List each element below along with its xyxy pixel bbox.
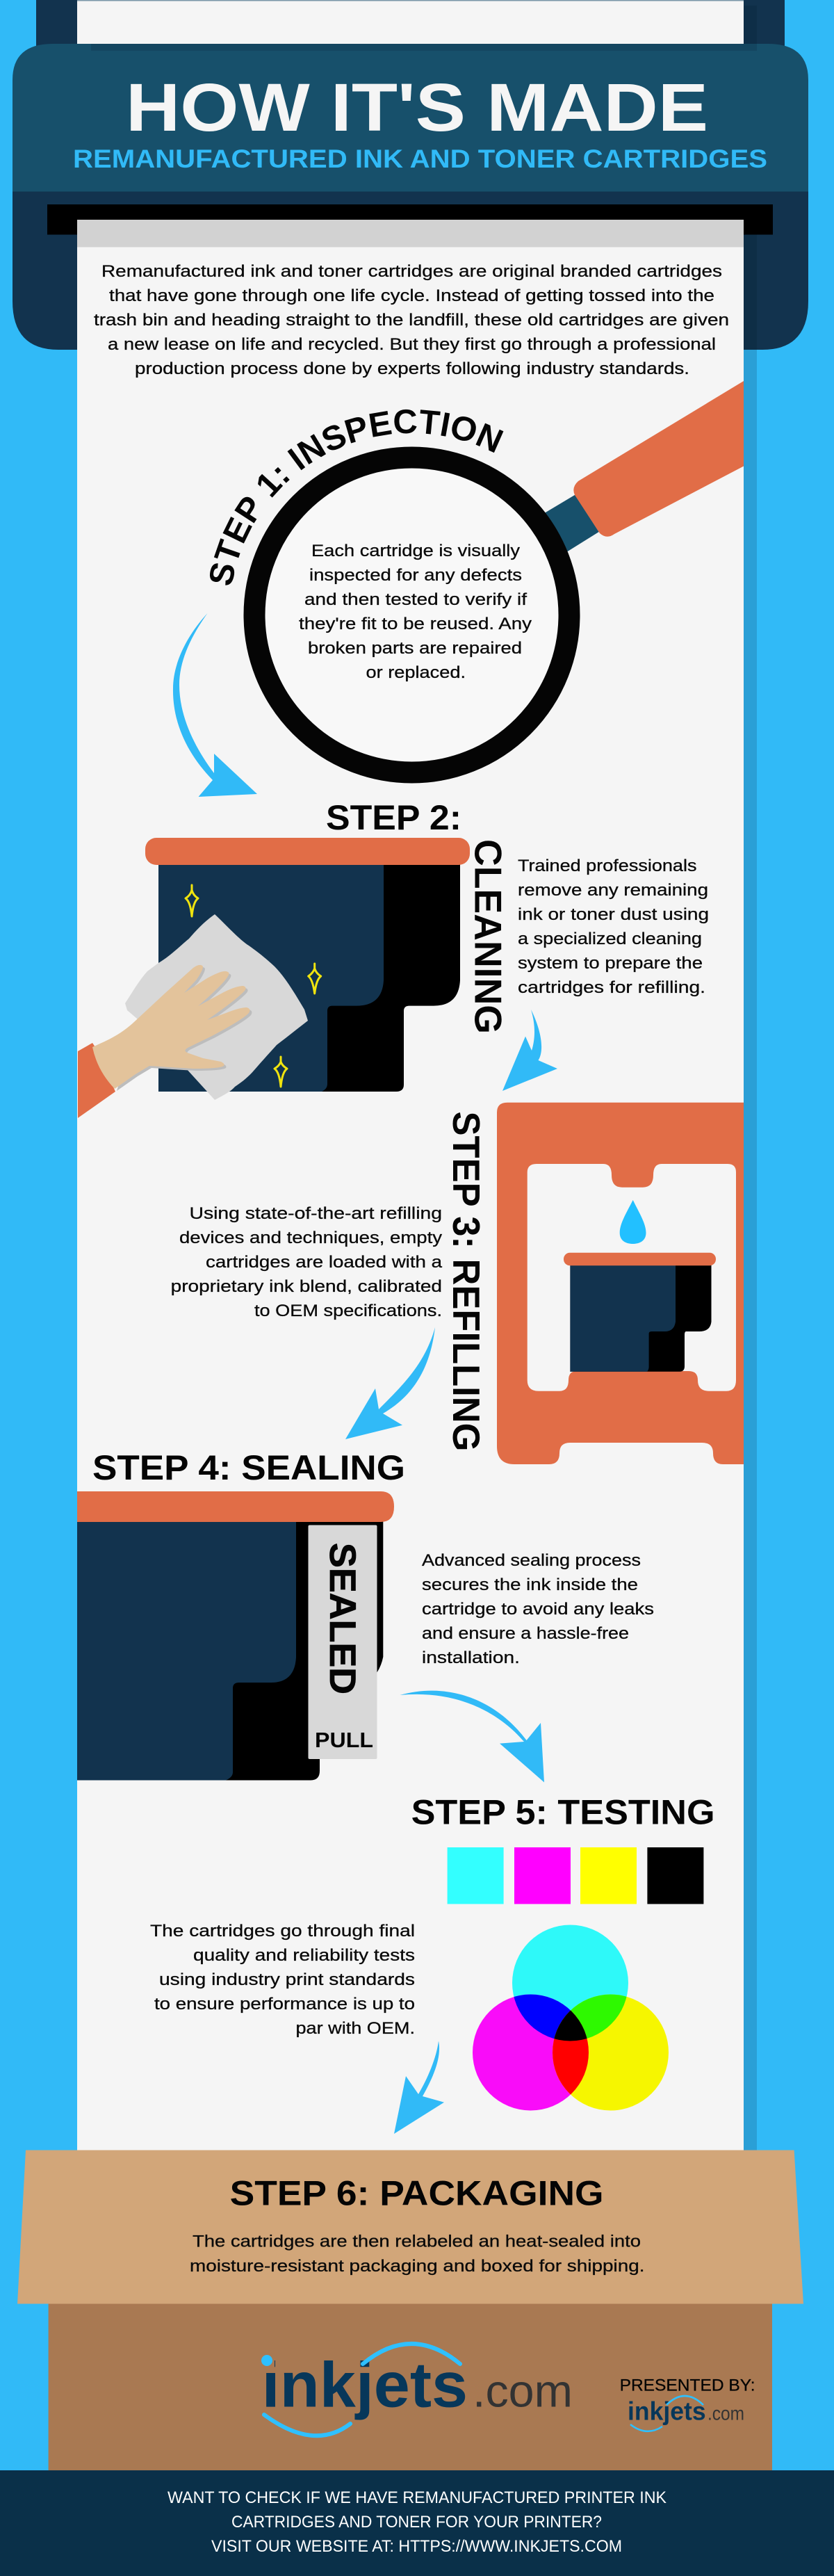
step 3 text: [171, 1204, 443, 1320]
intro text: Remanufactured ink and toner cartridges are original branded cartridges: [101, 262, 722, 281]
panel: box body: [49, 2303, 772, 2470]
step 5 heading: STEP 5: TESTING: [411, 1793, 715, 1832]
panel: box flap: [17, 2150, 803, 2304]
step 5 text: The cartridges go through final: [150, 1922, 415, 1941]
step 5 text: [150, 1922, 415, 2038]
step 4 text: installation.: [422, 1649, 520, 1667]
step 6 text: moisture-resistant packaging and boxed for shipping.: [190, 2257, 645, 2276]
paper sheet: [77, 220, 744, 2160]
panel: footer: [0, 2470, 834, 2576]
arrow: step 5 to step 6: [394, 2041, 444, 2134]
intro text: trash bin and heading straight to the landfill, these old cartridges are given: [94, 311, 729, 330]
arrow: step 4 to step 5: [400, 1691, 544, 1783]
logo: inkjets.com large: inkjets: [262, 2350, 468, 2421]
CMY overlapping circles: [473, 1925, 669, 2111]
step 1 text: [299, 542, 532, 682]
icon: sealed cartridge: [77, 1491, 394, 1780]
title: [73, 70, 767, 173]
label text: SEALED: [322, 1543, 363, 1694]
step 3 text: devices and techniques, empty: [179, 1229, 442, 1247]
label text: PULL: [315, 1728, 373, 1752]
footer text: WANT TO CHECK IF WE HAVE REMANUFACTURED PRINTER INK: [167, 2488, 667, 2507]
CMYK swatches: [448, 1847, 703, 1904]
intro text: production process done by experts following industry standards.: [135, 359, 689, 378]
step 2 text: remove any remaining: [518, 881, 708, 900]
step 3 text: Using state-of-the-art refilling: [189, 1204, 442, 1223]
arrow: step 2 to step 3: [502, 1010, 557, 1091]
sleeve: [78, 1043, 115, 1118]
ink drop: [620, 1200, 646, 1244]
step 3 text: proprietary ink blend, calibrated: [171, 1277, 442, 1296]
printer illustration: [13, 0, 808, 2157]
step 4 heading: STEP 4: SEALING: [92, 1448, 405, 1487]
small cartridge: [570, 1262, 712, 1372]
step 5 text: par with OEM.: [296, 2019, 415, 2038]
step 4 text: Advanced sealing process: [422, 1551, 641, 1570]
step 4 text: and ensure a hassle-free: [422, 1624, 629, 1643]
sparkles: [186, 885, 321, 1087]
step 2 heading: [326, 798, 510, 1034]
step 1 heading: STEP 1: INSPECTION: [210, 409, 503, 585]
intro text: [94, 262, 729, 378]
arrow: step 1 to step 2: [173, 613, 257, 797]
step 1 text: and then tested to verify if: [304, 590, 527, 609]
step 1 text: broken parts are repaired: [308, 639, 522, 658]
step 2 text: ink or toner dust using: [518, 905, 709, 924]
step 5 text: using industry print standards: [159, 1970, 415, 1989]
logo: inkjets.com small: .com: [708, 2403, 744, 2424]
step 2 heading: STEP 2:: [326, 798, 461, 837]
seal label: [309, 1525, 377, 1759]
step 2 text: [518, 857, 709, 997]
footer text: VISIT OUR WEBSITE AT: HTTPS://WWW.INKJETS.COM: [211, 2537, 622, 2556]
step 5 text: to ensure performance is up to: [154, 1995, 415, 2014]
step 5 text: quality and reliability tests: [193, 1946, 415, 1965]
step 2 heading: CLEANING: [467, 839, 510, 1034]
step 2 text: Trained professionals: [518, 857, 696, 875]
step 4 text: [422, 1551, 654, 1667]
logo: inkjets.com large: [261, 2344, 573, 2436]
step 2 text: cartridges for refilling.: [518, 978, 705, 997]
step 1 text: inspected for any defects: [309, 566, 522, 585]
icon: refilling machine: [497, 1103, 744, 1464]
step 3 text: cartridges are loaded with a: [206, 1253, 443, 1272]
step 1 text: they're fit to be reused. Any: [299, 615, 532, 633]
step 1 text: Each cartridge is visually: [311, 542, 520, 560]
step 1 text: or replaced.: [366, 663, 466, 682]
footer text: CARTRIDGES AND TONER FOR YOUR PRINTER?: [231, 2513, 602, 2532]
step 4 text: cartridge to avoid any leaks: [422, 1600, 654, 1619]
hand: [92, 965, 250, 1089]
step 3 text: to OEM specifications.: [254, 1302, 442, 1320]
step 6 text: [190, 2233, 645, 2276]
cloth: [125, 914, 308, 1100]
logo: inkjets.com small: [628, 2396, 744, 2431]
hand shadow: [117, 967, 252, 1091]
step 2 text: a specialized cleaning: [518, 930, 702, 948]
title: HOW IT'S MADE: [126, 70, 708, 145]
logo: inkjets.com small: inkjets: [628, 2397, 706, 2426]
step 2 text: system to prepare the: [518, 954, 703, 973]
icon: magnifying glass: [254, 381, 744, 772]
intro text: a new lease on life and recycled. But they first go through a professional: [108, 335, 716, 354]
intro text: that have gone through one life cycle. Instead of getting tossed into the: [109, 286, 714, 305]
title: REMANUFACTURED INK AND TONER CARTRIDGES: [73, 145, 767, 173]
step 4 text: secures the ink inside the: [422, 1575, 638, 1594]
footer text: [167, 2488, 667, 2556]
step 6 heading: STEP 6: PACKAGING: [230, 2173, 604, 2212]
presented by label: PRESENTED BY:: [620, 2376, 755, 2395]
icon: cartridge being wiped: [78, 838, 470, 1118]
step 3 heading: STEP 3: REFILLING: [445, 1111, 488, 1452]
arrow: step 3 to step 4: [345, 1327, 435, 1439]
step 6 text: The cartridges are then relabeled an heat-sealed into: [193, 2233, 641, 2251]
logo: inkjets.com large: .com: [473, 2365, 573, 2417]
label text: [315, 1543, 373, 1752]
